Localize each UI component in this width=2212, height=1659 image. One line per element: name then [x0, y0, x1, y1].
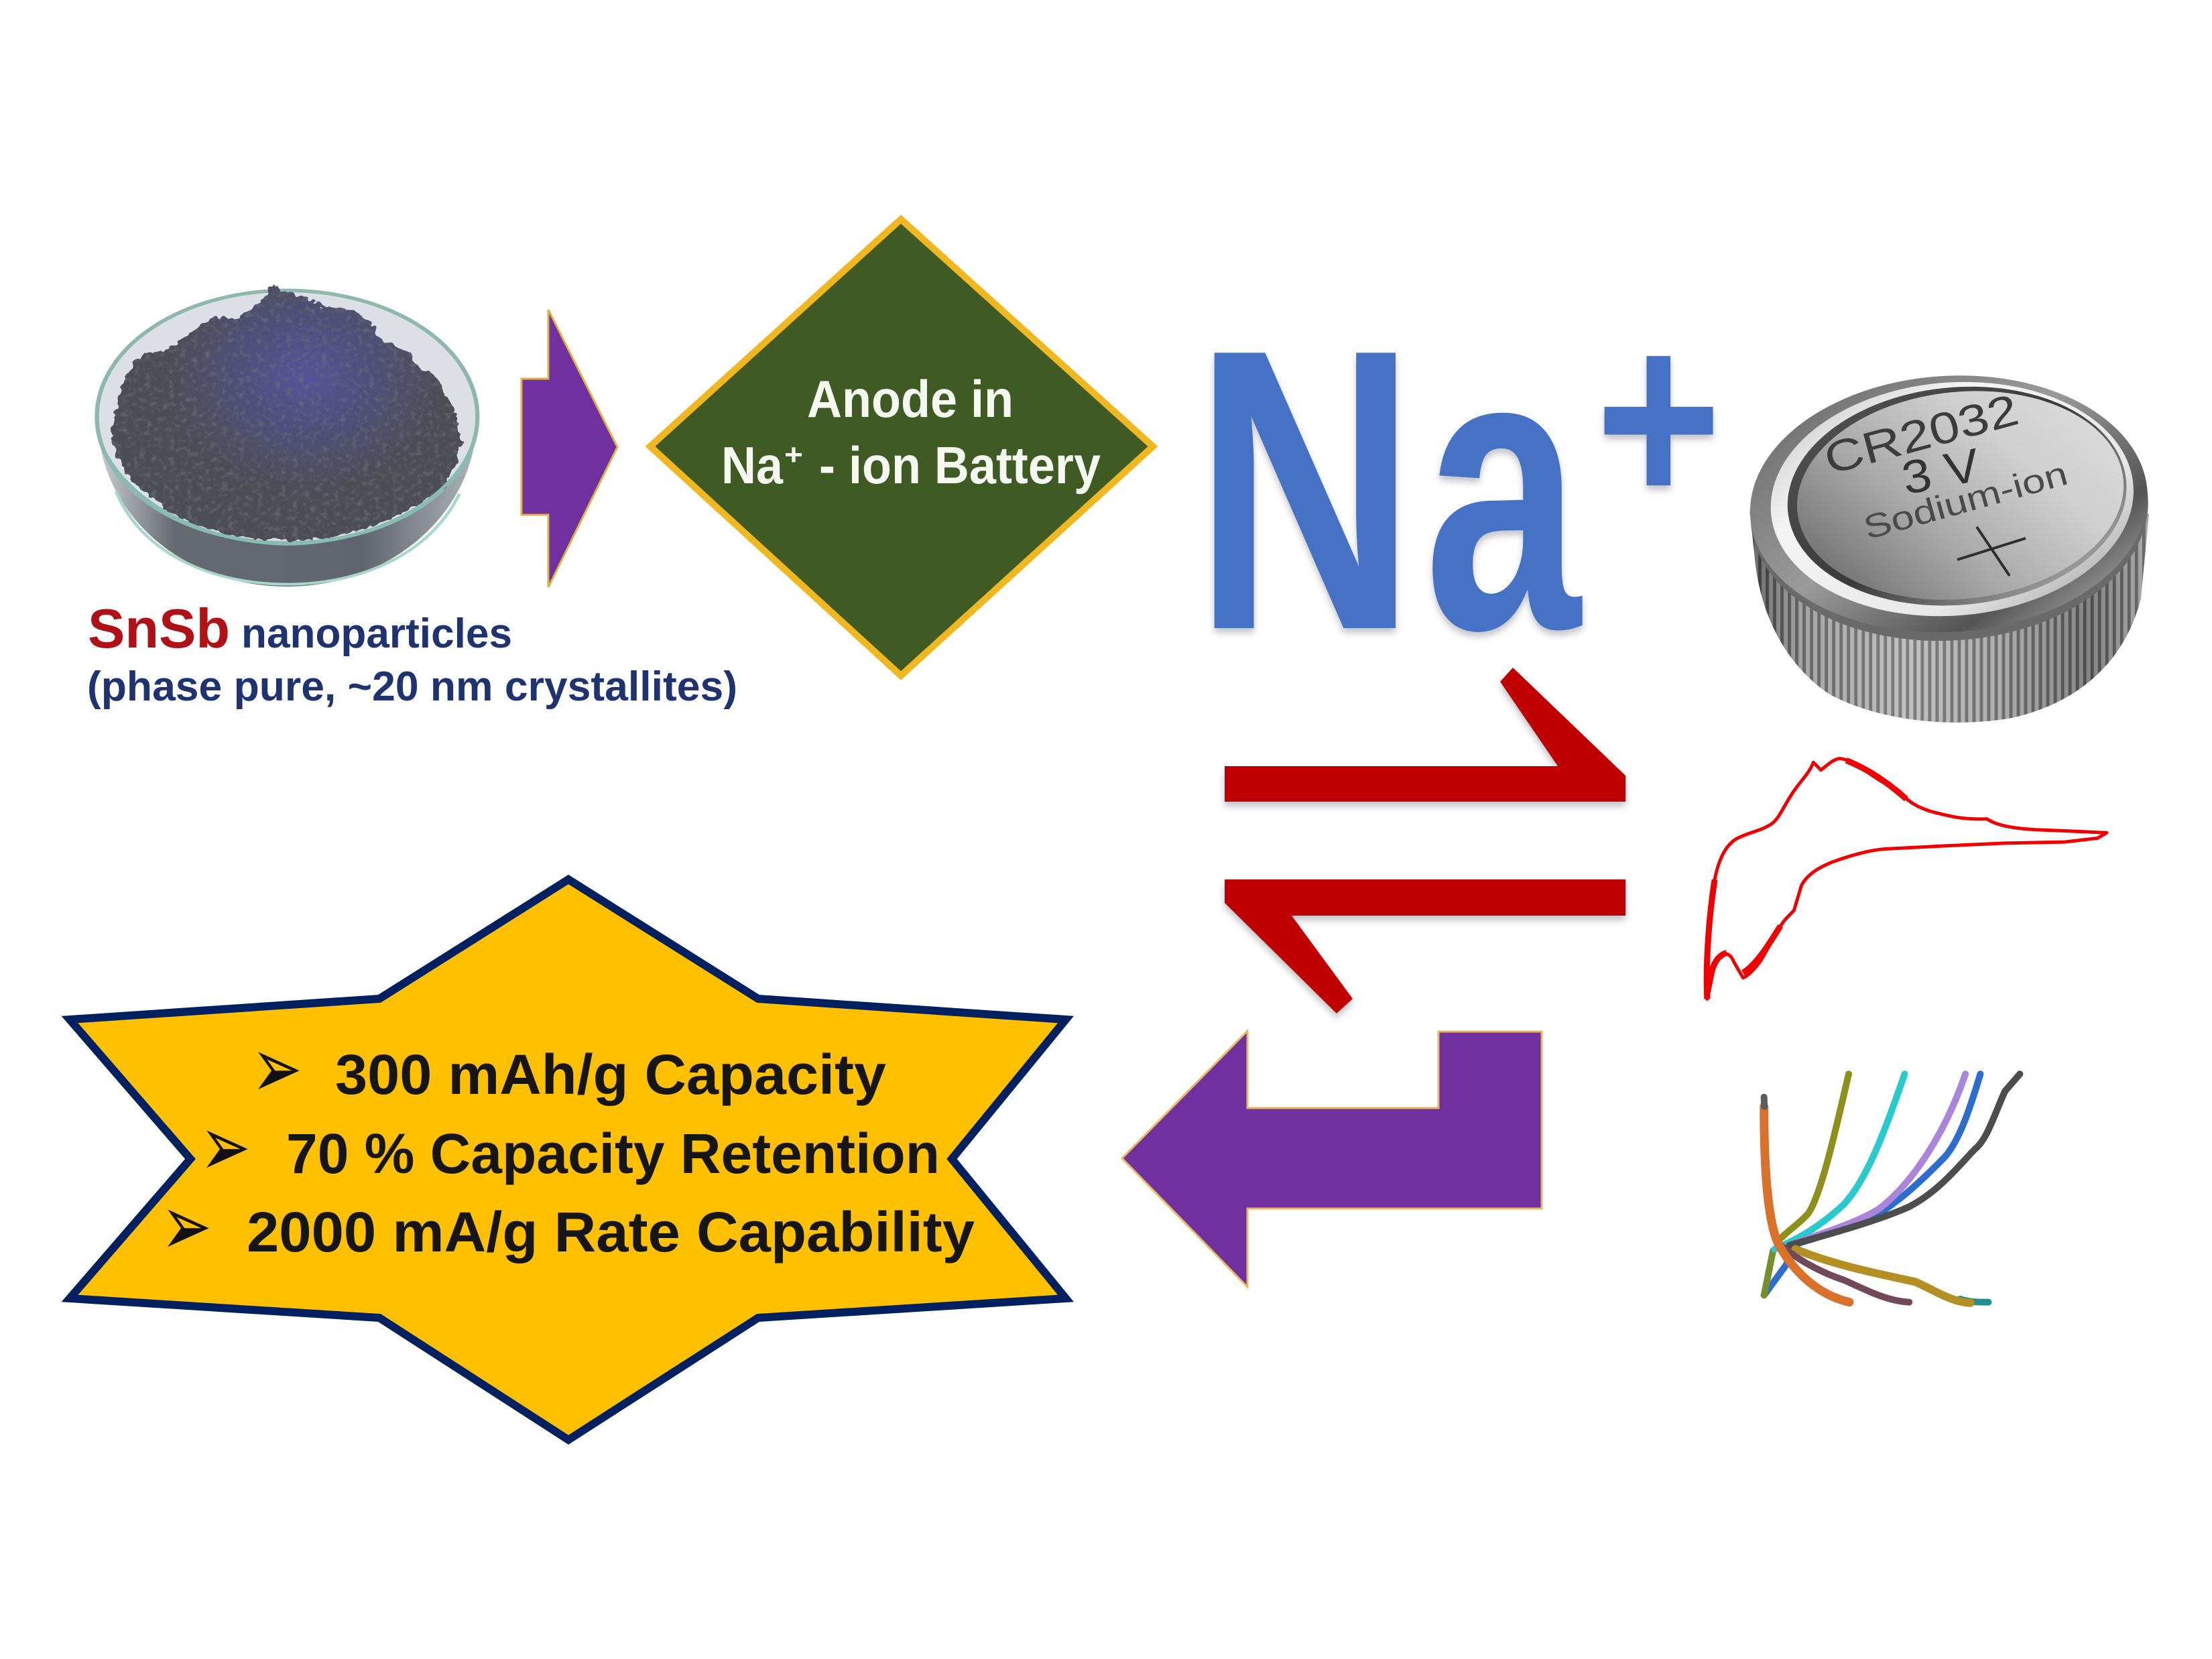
- heading: Na+: N: [1194, 266, 1416, 713]
- battery label: 3 V: 3 V: [1898, 438, 1984, 505]
- text: capacity: 300 mAh/g Capacity: [335, 1043, 886, 1106]
- battery label: Sodium-ion: Sodium-ion: [1859, 454, 2072, 547]
- chart: cyclic voltammogram curve: [1706, 759, 2107, 999]
- battery body: [1738, 361, 2160, 723]
- arrow: purple arrow to anode: [521, 310, 617, 587]
- bullet 2: ➢: [200, 1097, 251, 1196]
- arrow: red reverse reaction arrow: [1225, 879, 1625, 1013]
- label: Anode in: Anode in: [807, 369, 1013, 428]
- battery label: CR2032: CR2032: [1819, 384, 2024, 484]
- bullet 3: ➢: [161, 1176, 212, 1275]
- panel: performance star: [70, 879, 1066, 1440]
- photo: petri dish with SnSb powder: [97, 284, 477, 587]
- text: retention: 70 % Capacity Retention: [286, 1122, 940, 1185]
- arrow: red forward reaction arrow: [1225, 668, 1625, 802]
- shape: green diamond: [650, 219, 1153, 676]
- icon: sodium-ion coin cell: [1738, 361, 2160, 723]
- label: Na+ ion Battery: - ion Battery: [819, 436, 1101, 495]
- caption: SnSb nanoparticles: SnSb: [88, 597, 230, 660]
- caption: phase pure crystallites: (phase pure, ~20 nm crystallites): [87, 664, 737, 710]
- heading: Na+: [1194, 266, 1722, 713]
- arrow: purple return arrow: [1122, 1031, 1542, 1287]
- shape: six-point star: [70, 879, 1066, 1440]
- battery plus sign: [1957, 527, 2026, 576]
- panel: anode diamond: [650, 219, 1153, 676]
- label: Na+ ion Battery: Na: [721, 436, 784, 495]
- panel: SnSb nanoparticles sample: [87, 284, 737, 710]
- bullet 1: ➢: [251, 1019, 302, 1117]
- heading: Na+: a: [1424, 266, 1583, 713]
- heading: Na+: +: [1595, 275, 1722, 560]
- chart: coloured charge-discharge curves: [1764, 1074, 2020, 1303]
- label: Na+ ion Battery: +: [784, 438, 803, 471]
- caption: SnSb nanoparticles: nanoparticles: [241, 611, 512, 657]
- text: rate capability: 2000 mA/g Rate Capability: [247, 1201, 975, 1264]
